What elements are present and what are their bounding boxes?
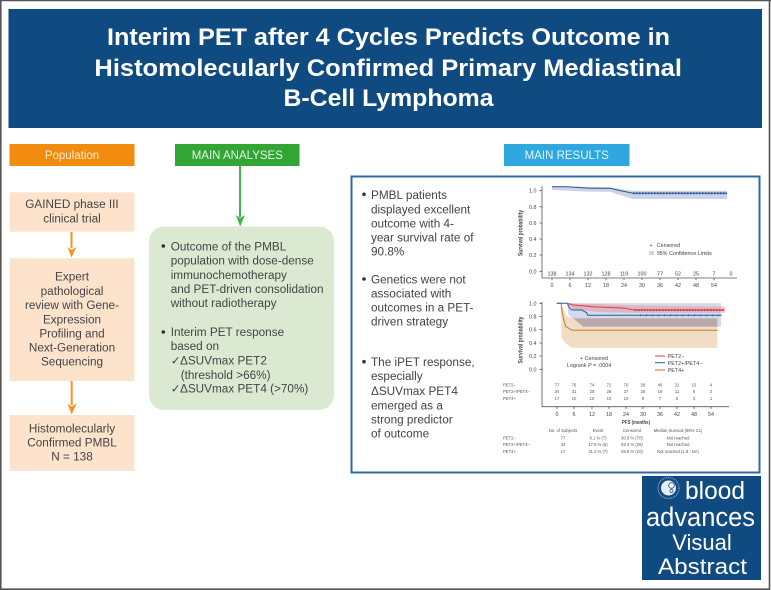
chart: overall survival: 119 [620,271,628,277]
panel: main analyses: based on [171,340,219,353]
population box: expert review: Next-Generation [29,342,115,355]
chart: PFS by PET response: 31 [675,382,680,388]
chart: PFS by PET response: 10 [607,396,612,401]
chart: PFS by PET response: 72 [607,382,612,388]
chart: PFS by PET response: 77 [555,382,560,388]
logo: blood advances visual abstract: Abstract [658,554,747,579]
chart: overall survival: 128 [602,271,610,277]
chart: PFS by PET response: 0 [556,412,558,418]
summary table: 90.9 % (70) [621,436,643,440]
summary table: Median Survival (95% CL) [654,428,703,433]
chart: overall survival: 0.4 [529,237,536,243]
panel: main analyses: immunochemotherapy [171,269,287,282]
summary table: 58.8 % (10) [621,449,643,454]
chart: PFS by PET response: 15 [692,382,697,388]
chart: PFS by PET response: 1 [710,396,713,401]
chart: PFS by PET response: 19 [658,389,663,394]
title banner [8,9,762,128]
population box: confirmed PMBL [10,415,134,471]
chart: PFS by PET response: 10 [624,396,629,401]
population box: expert review: pathological [41,285,103,298]
heading: population [10,144,134,166]
title banner: B-Cell Lymphoma [284,85,494,112]
chart: overall survival: 25 [693,271,699,277]
chart: PFS by PET response: PFS (months) [622,420,650,426]
chart: overall survival: 0.0 [529,269,536,275]
chart: PFS by PET response: 28 [590,389,595,394]
key results text: PMBL patients [371,189,447,202]
panel: main analyses: and PET-driven consolidation [171,283,324,296]
chart: PFS by PET response [503,301,729,426]
chart: PFS by PET response: 0.8 [529,314,536,320]
key results text: year survival rate of [371,232,474,245]
summary table [503,428,703,454]
summary table: 41.2 % (7) [588,449,608,454]
chart: PFS by PET response: 0.2 [529,354,536,360]
heading: main results [504,144,630,166]
panel: main analyses: without radiotherapy [170,297,277,310]
panel: main analyses: ✓ [171,354,181,368]
chart: PFS by PET response: 18 [606,412,612,418]
chart: PFS by PET response: 70 [624,382,629,388]
population box: GAINED trial: GAINED phase III [25,198,119,211]
population box: GAINED trial: clinical trial [43,212,101,226]
chart: overall survival: Censored [657,243,680,249]
chart: PFS by PET response: 34 [555,389,560,394]
summary table: Not reached (1.8 ; NA) [657,449,700,454]
population box: expert review [10,258,134,381]
panel: main analyses [149,226,334,410]
chart: PFS by PET response: Logrank P = .0004 [567,363,611,369]
chart: overall survival: 132 [584,271,592,277]
heading: population: Population [45,150,99,162]
title banner: Histomolecularly Confirmed Primary Mediastinal [94,55,682,82]
chart: PFS by PET response: 2 [710,389,713,394]
panel: main analyses: (threshold >66%) [181,369,271,382]
chart: PFS by PET response: 28 [607,389,612,394]
population box: confirmed PMBL: Histomolecularly [29,422,115,435]
panel: main analyses: population with dose-dense [171,255,314,268]
summary table: No. of Subjects [549,428,577,433]
title banner: Interim PET after 4 Cycles Predicts Outcome in [107,24,670,51]
chart: overall survival: 0.8 [529,205,536,211]
chart: PFS by PET response: 5 [676,396,679,401]
chart: overall survival: 48 [693,283,699,289]
summary table: 77 [561,436,566,440]
chart: overall survival: + [650,243,653,249]
chart: PFS by PET response: PET4+ [503,396,516,401]
population box: expert review: Profiling and [39,327,105,340]
logo: blood advances visual abstract [642,476,761,580]
chart: PFS by PET response: 76 [572,382,577,388]
chart: PFS by PET response: 0.6 [529,328,536,334]
chart: PFS by PET response: 7 [659,396,662,401]
chart: PFS by PET response: 58 [641,382,646,388]
summary table: Event [593,428,604,433]
chart: overall survival: Survival probability [518,210,524,256]
logo: blood advances visual abstract: blood [685,477,745,505]
key results text: outcome with 4- [371,217,454,230]
chart: PFS by PET response: 27 [624,389,629,394]
chart: PFS by PET response: 54 [708,412,714,418]
chart: PFS by PET response: PET2+/PET4− [503,389,531,394]
chart: PFS by PET response: 11 [675,389,680,394]
chart: PFS by PET response: + Censored [580,356,608,362]
summary table: PET2− [503,436,516,440]
chart: PFS by PET response: 1.0 [529,301,536,307]
chart: overall survival: 138 [548,271,556,277]
key results text: emerged as a [371,399,443,412]
chart: overall survival [518,186,737,289]
icon: blood journal seal [658,478,679,498]
chart: PFS by PET response: 30 [640,412,646,418]
chart: PFS by PET response: 0.0 [529,367,536,373]
panel: main analyses: ΔSUVmax PET4 (>70%) [180,383,308,396]
population box: expert review: Sequencing [41,356,103,369]
chart: overall survival: 24 [621,283,627,289]
chart: overall survival: 1.0 [529,189,536,195]
chart: PFS by PET response: PET2− [503,382,516,388]
chart: PFS by PET response: 25 [641,389,646,394]
chart: PFS by PET response: PET2+/PET4− [668,361,702,367]
population box: confirmed PMBL: N = 138 [51,451,93,464]
arrow: trial to review [70,232,72,248]
summary table: PET2+/PET4− [503,442,531,447]
key results text [362,189,475,441]
summary table: Censored [623,428,642,433]
summary table: 9.1 % (7) [590,436,607,440]
key results text: of outcome [371,428,430,441]
summary table: Not reached [667,436,690,440]
chart: overall survival: 0.6 [529,221,536,227]
chart: overall survival: 100 [638,271,646,277]
chart: PFS by PET response: Survival probability [518,316,524,364]
arrow: analyses down [239,166,241,217]
chart: PFS by PET response: PET4+ [668,368,684,374]
chart: PFS by PET response: 48 [691,412,697,418]
key results text: especially [371,370,423,383]
chart: overall survival: 0 [550,283,554,289]
summary table: 34 [561,442,566,447]
chart: PFS by PET response: 10 [572,396,577,401]
chart: overall survival: 77 [657,271,663,277]
summary table: 17.6 % (6) [588,442,608,447]
chart: PFS by PET response: PET2− [668,354,684,360]
chart: PFS by PET response: 4 [710,382,713,388]
chart: PFS by PET response: 6 [572,412,576,418]
key results text: displayed excellent [371,203,471,216]
chart: PFS by PET response: 42 [674,412,680,418]
population box: confirmed PMBL: Confirmed PMBL [27,437,117,450]
panel: main analyses: ✓ [171,383,181,396]
chart: PFS by PET response: 9 [642,396,645,401]
chart: overall survival: 12 [585,283,591,289]
chart: overall survival: 7 [712,271,716,277]
key results text: ΔSUVmax PET4 [371,385,458,398]
population box: expert review: Expression [43,313,101,326]
logo: blood advances visual abstract: advances [646,502,755,532]
chart: overall survival: 95% Confidence Limits [657,251,712,257]
chart: PFS by PET response: 74 [590,382,595,388]
key results text: outcomes in a PET- [371,302,474,315]
summary table: Not reached [667,442,690,447]
chart: PFS by PET response: 31 [572,389,577,394]
chart: PFS by PET response: 17 [555,396,560,401]
population box: GAINED trial [10,192,134,232]
chart: overall survival: 54 [711,283,717,289]
key results text: strong predictor [371,413,453,426]
chart: PFS by PET response: 0.4 [529,341,536,347]
chart: overall survival: 18 [603,283,609,289]
chart: PFS by PET response: 24 [623,412,629,418]
population box: expert review: Expert [55,271,90,284]
summary table: PET4+ [503,449,516,454]
chart: overall survival: 42 [675,283,681,289]
summary table: 82.4 % (28) [621,442,643,447]
key results text: The iPET response, [371,356,475,369]
summary table: 17 [561,449,566,454]
key results text: associated with [371,287,451,300]
key results text: Genetics were not [371,273,466,286]
chart: overall survival: 0 [730,271,732,277]
chart: PFS by PET response: 10 [590,396,595,401]
panel: main analyses: Interim PET response [171,326,285,339]
chart: PFS by PET response: 46 [658,382,663,388]
panel: main analyses: ΔSUVmax PET2 [180,354,267,368]
chart: overall survival: 6 [568,283,572,289]
arrow: review to confirmed [71,381,73,405]
heading: main analyses: MAIN ANALYSES [192,150,283,162]
chart: overall survival: 52 [675,271,681,277]
chart: overall survival: 134 [566,271,574,277]
chart: overall survival: 30 [639,283,645,289]
chart: PFS by PET response: 3 [693,396,696,401]
heading: main analyses [175,144,300,166]
panel: main results [352,176,760,472]
chart: PFS by PET response: 6 [693,389,696,394]
chart: overall survival: 36 [657,283,663,289]
population box: expert review: review with Gene- [25,299,119,312]
chart: PFS by PET response: 12 [589,412,595,418]
panel: main analyses: Outcome of the PMBL [171,241,287,254]
heading: main results: MAIN RESULTS [525,150,609,162]
chart: overall survival: 0.2 [529,253,536,259]
key results text: driven strategy [371,316,448,329]
key results text: 90.8% [371,246,405,259]
logo: blood advances visual abstract: Visual [672,530,732,555]
chart: PFS by PET response: 36 [657,412,663,418]
